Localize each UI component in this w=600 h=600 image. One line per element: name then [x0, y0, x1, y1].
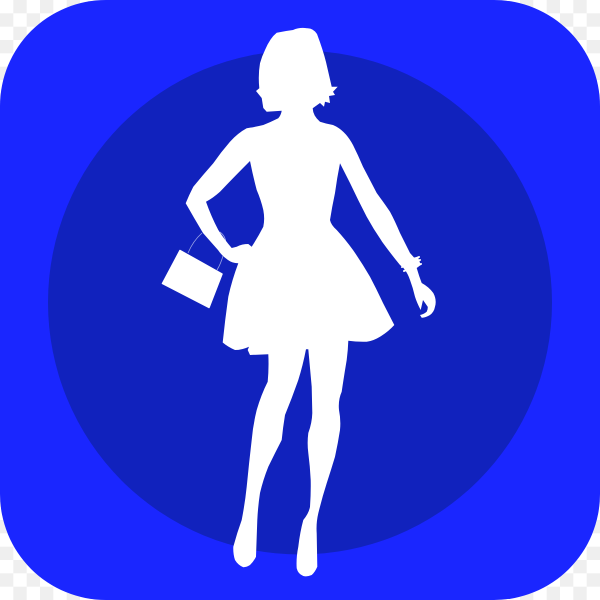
- bracelets: [401, 257, 421, 271]
- dark blue circle: [48, 50, 552, 554]
- handbag straps: [188, 232, 226, 270]
- handbag: [162, 250, 222, 308]
- body: [186, 28, 436, 576]
- icon: woman silhouette with handbag: [162, 28, 436, 576]
